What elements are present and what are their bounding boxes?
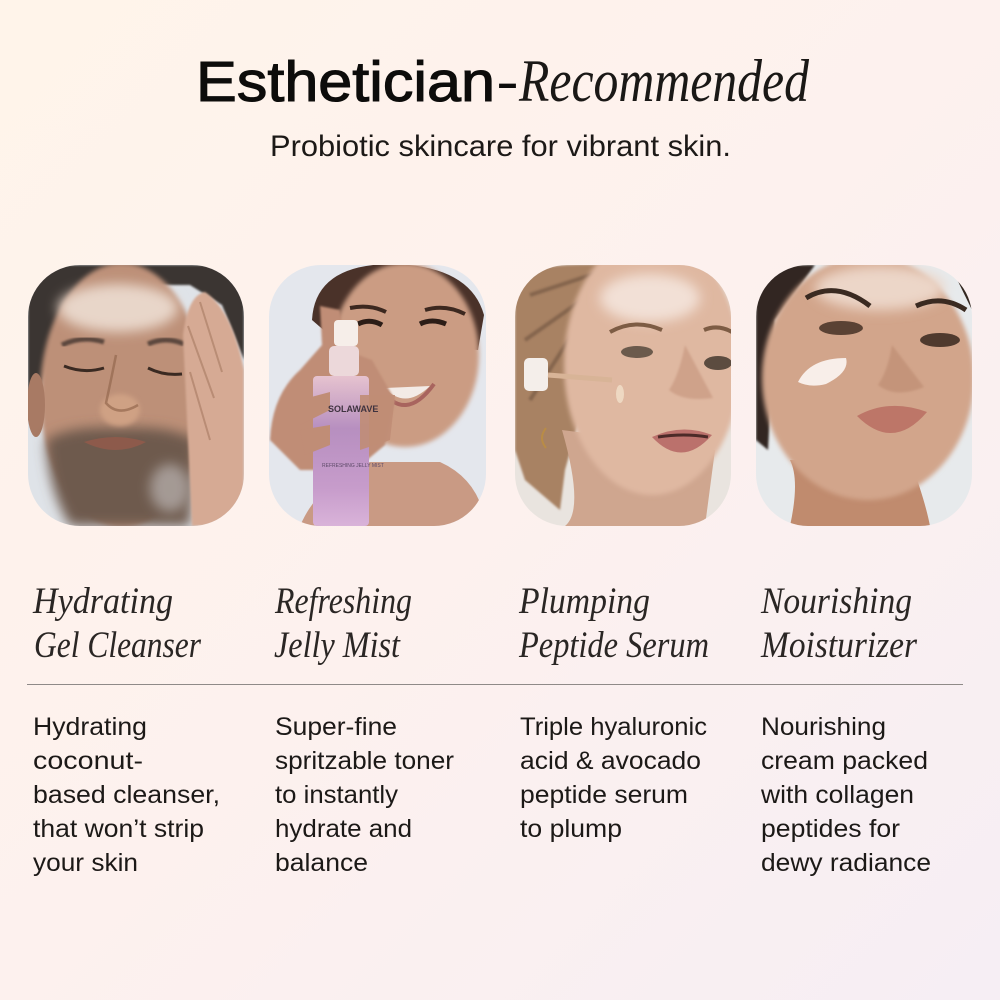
heading: Nourishing Moisturizer: Nourishing bbox=[760, 581, 912, 622]
heading: Nourishing Moisturizer bbox=[760, 581, 918, 666]
heading: Hydrating Gel Cleanser: Gel Cleanser bbox=[34, 625, 202, 666]
photo: man washing face with foam bbox=[27, 263, 244, 527]
text: serum description: acid & avocado bbox=[520, 747, 701, 775]
text: cleanser description bbox=[33, 713, 220, 877]
text: cleanser description: that won’t strip bbox=[33, 815, 204, 843]
text: mist description: spritzable toner bbox=[275, 747, 454, 775]
text: moisturizer description: Nourishing bbox=[761, 713, 886, 741]
text: moisturizer description: cream packed bbox=[761, 747, 928, 775]
photo: woman applying serum bbox=[515, 265, 731, 526]
text: cleanser description: based cleanser, bbox=[33, 781, 220, 809]
heading: Hydrating Gel Cleanser bbox=[32, 581, 202, 666]
text: moisturizer description: dewy radiance bbox=[761, 849, 931, 877]
heading: Refreshing Jelly Mist: Refreshing bbox=[274, 581, 412, 622]
heading: Plumping Peptide Serum bbox=[518, 581, 709, 666]
title: - bbox=[496, 50, 519, 114]
text: cleanser description: Hydrating bbox=[33, 713, 147, 741]
text: mist description: to instantly bbox=[275, 781, 399, 809]
heading: Plumping Peptide Serum: Plumping bbox=[518, 581, 650, 622]
photo: woman holding jelly mist bottle: SOLAWAVE bbox=[328, 404, 378, 414]
photo: woman holding jelly mist bottle: REFRESHING JELLY MIST bbox=[322, 463, 384, 469]
text: cleanser description: your skin bbox=[33, 849, 138, 877]
text: serum description bbox=[520, 713, 707, 843]
heading: Refreshing Jelly Mist: Jelly Mist bbox=[274, 625, 401, 666]
text: moisturizer description: with collagen bbox=[760, 781, 914, 809]
text: serum description: peptide serum bbox=[520, 781, 688, 809]
text: cleanser description: coconut- bbox=[33, 747, 143, 775]
heading: Plumping Peptide Serum: Peptide Serum bbox=[518, 625, 709, 666]
text: serum description: Triple hyaluronic bbox=[520, 713, 707, 741]
heading: Hydrating Gel Cleanser: Hydrating bbox=[32, 581, 173, 622]
title: Esthetician bbox=[196, 50, 495, 114]
title bbox=[196, 48, 810, 114]
text: moisturizer description: peptides for bbox=[761, 815, 900, 843]
title: Recommended bbox=[518, 48, 810, 114]
subtitle: Probiotic skincare for vibrant skin. bbox=[270, 130, 731, 163]
text: mist description: hydrate and bbox=[275, 815, 412, 843]
heading: Refreshing Jelly Mist bbox=[274, 581, 412, 666]
photo: woman with moisturizer on cheek bbox=[756, 256, 974, 526]
text: mist description: balance bbox=[275, 849, 368, 877]
heading: Nourishing Moisturizer: Moisturizer bbox=[760, 625, 918, 666]
photo: woman holding jelly mist bottle bbox=[269, 263, 486, 526]
text: serum description: to plump bbox=[520, 815, 622, 843]
text: mist description bbox=[275, 713, 454, 877]
text: mist description: Super-fine bbox=[275, 713, 397, 741]
text: moisturizer description bbox=[760, 713, 931, 877]
